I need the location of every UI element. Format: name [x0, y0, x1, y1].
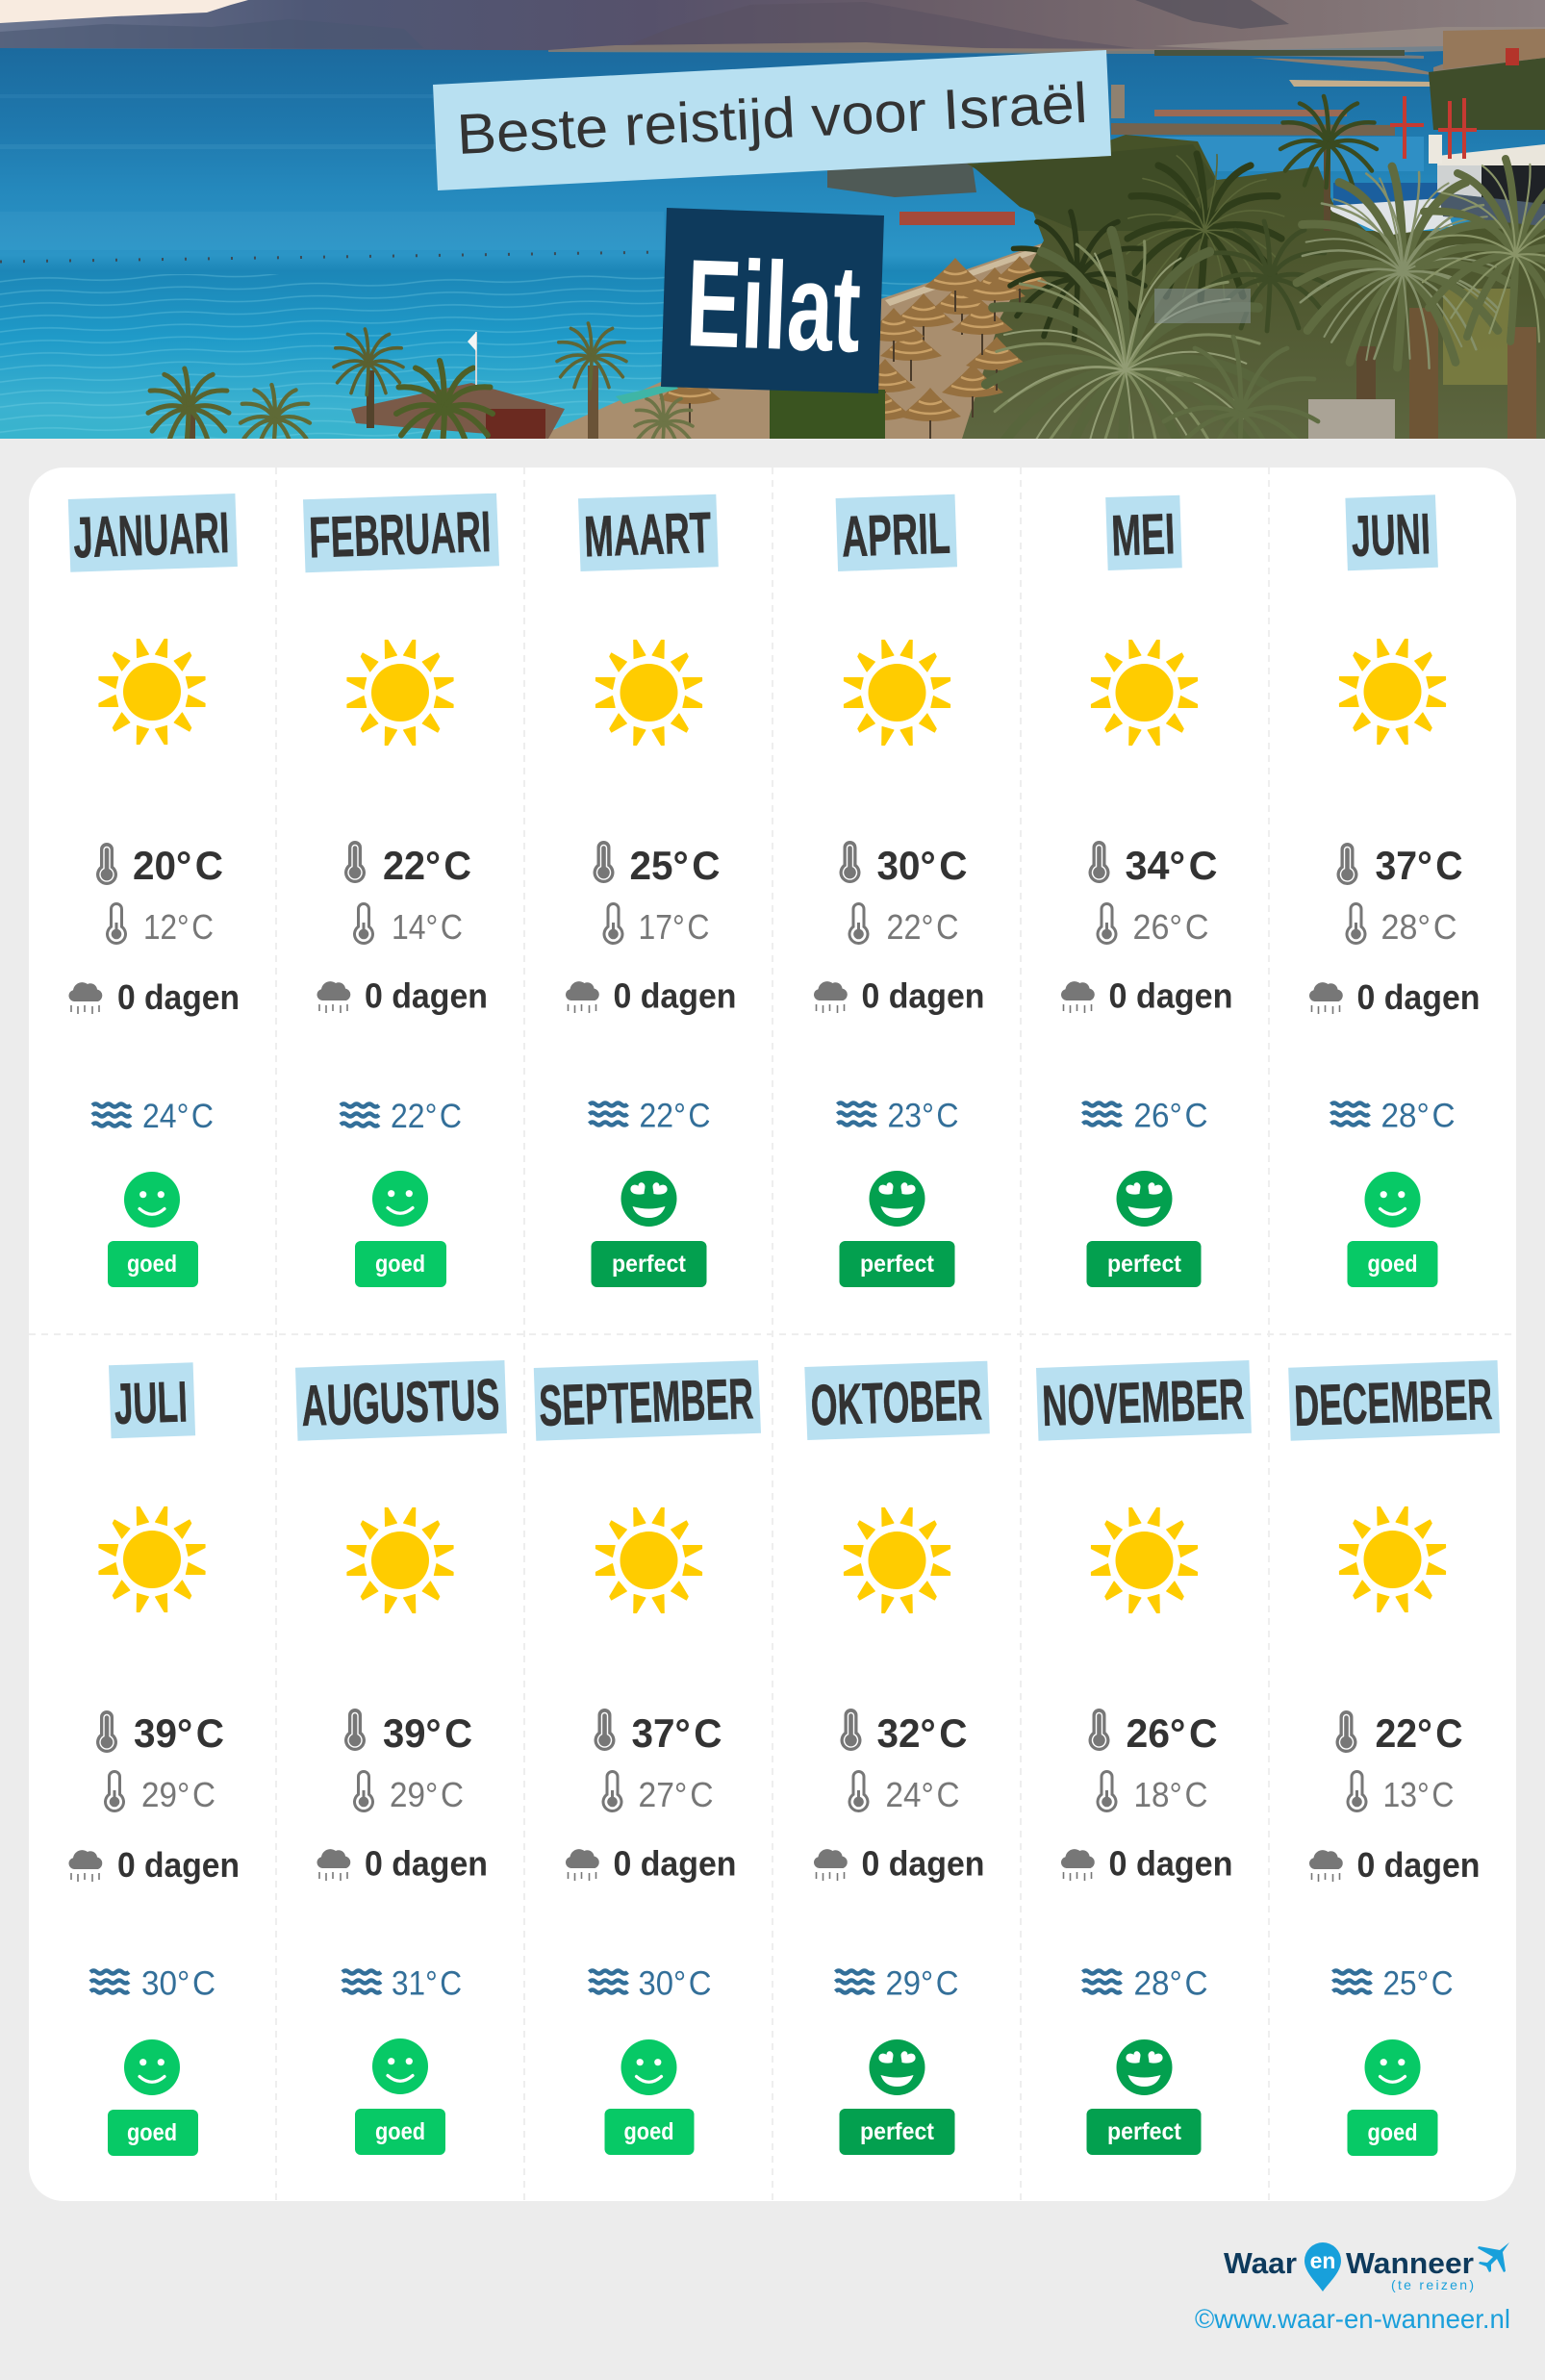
- column: juli: [68, 1362, 240, 2156]
- low temperature: 27° C: [639, 1775, 714, 1814]
- rain days: 0 dagen: [365, 1843, 488, 1884]
- rating: goed: goed: [1368, 1251, 1418, 1278]
- month label: APRIL: [841, 501, 951, 569]
- sea temperature: 29° C: [885, 1965, 958, 2003]
- high temperature: [595, 1709, 722, 1756]
- rating: perfect: [1087, 1171, 1201, 1287]
- rating: perfect: [839, 1171, 954, 1287]
- high temperature: [1335, 1710, 1462, 1756]
- small palms on the left: [148, 323, 693, 452]
- pier near title: [827, 160, 976, 197]
- logo: Waar en Wanneer: Waar: [1224, 2246, 1297, 2280]
- low temperature: 17° C: [639, 907, 710, 947]
- low temperature: [602, 1770, 714, 1814]
- high temperature: [1089, 841, 1218, 888]
- sea temperature: 22° C: [391, 1098, 462, 1135]
- low temperature: 28° C: [1381, 907, 1456, 947]
- high temperature: [344, 1709, 472, 1756]
- rain days: 0 dagen: [1108, 975, 1233, 1016]
- rain days: 0 dagen: [117, 1845, 240, 1885]
- logo: Waar en Wanneer: (te reizen): [1391, 2277, 1474, 2292]
- logo: Waar en Wanneer: en: [1310, 2248, 1335, 2273]
- low temperature: [353, 1770, 464, 1814]
- month label: JANUARI: [72, 500, 230, 570]
- low temperature: 29° C: [390, 1775, 464, 1814]
- rating: perfect: [591, 1171, 706, 1287]
- sea temperature: 30° C: [639, 1965, 712, 2003]
- icon: sun: [1091, 1508, 1197, 1612]
- month label: JUNI: [1351, 501, 1431, 569]
- rain days: [566, 1843, 737, 1884]
- month label: [1036, 1360, 1252, 1441]
- high temperature: 39° C: [134, 1710, 224, 1756]
- sea temperature: [1331, 1098, 1455, 1135]
- sea temperature: 25° C: [1383, 1965, 1453, 2003]
- icon: sun: [845, 1508, 950, 1612]
- rating: goed: [108, 1172, 198, 1287]
- subtitle banner: Eilat: [661, 208, 884, 393]
- month label: [295, 1360, 507, 1441]
- boats and jetty: [1154, 110, 1347, 116]
- sea temperature: 28° C: [1381, 1098, 1455, 1135]
- month label: [836, 494, 957, 571]
- column: december: [1288, 1360, 1500, 2156]
- rain days: [317, 975, 488, 1016]
- rain days: [814, 975, 985, 1016]
- left beach hut: [351, 383, 565, 439]
- column: september: [534, 1360, 761, 2155]
- sea temperature: 23° C: [887, 1098, 958, 1135]
- sea temperature: [341, 1098, 462, 1135]
- month label: MAART: [583, 500, 712, 569]
- low temperature: [1097, 1770, 1208, 1814]
- sea temperature: 24° C: [142, 1098, 214, 1135]
- high temperature: [839, 841, 968, 888]
- month label: SEPTEMBER: [538, 1366, 754, 1438]
- column: maart: [566, 494, 737, 1287]
- rain days: [68, 977, 240, 1017]
- rating: goed: [1347, 1172, 1437, 1287]
- month label: [303, 494, 499, 572]
- rain days: 0 dagen: [1356, 1845, 1480, 1885]
- rain days: 0 dagen: [862, 1843, 985, 1884]
- low temperature: 14° C: [392, 907, 463, 947]
- high temperature: 30° C: [877, 843, 968, 888]
- rating: goed: goed: [127, 1251, 177, 1278]
- rain days: [68, 1845, 240, 1885]
- high temperature: [593, 841, 720, 888]
- rating: goed: goed: [375, 1251, 425, 1278]
- month label: OKTOBER: [810, 1367, 983, 1437]
- panel: climate table card: [29, 468, 1516, 2201]
- month label: [109, 1362, 195, 1438]
- rating: goed: [355, 1171, 446, 1287]
- rating: perfect: perfect: [1107, 1251, 1182, 1278]
- title text: Beste reistijd voor Israël: [455, 71, 1089, 166]
- rating: goed: goed: [127, 2119, 177, 2146]
- low temperature: 13° C: [1383, 1775, 1455, 1814]
- rating: goed: goed: [375, 2118, 425, 2145]
- sea temperature: 22° C: [639, 1098, 710, 1135]
- rating: perfect: perfect: [860, 2118, 935, 2145]
- rating: perfect: [1087, 2039, 1201, 2155]
- low temperature: [848, 902, 958, 947]
- column: januari: [68, 494, 240, 1287]
- column: februari: [303, 494, 499, 1287]
- low temperature: [848, 1770, 960, 1814]
- low temperature: [1347, 1770, 1455, 1814]
- sea temperature: [1083, 1098, 1208, 1135]
- high temperature: 22° C: [383, 843, 471, 888]
- rating: goed: [355, 2038, 445, 2155]
- sea temperature: [837, 1098, 958, 1135]
- icon: sun: [99, 639, 205, 745]
- column: april: [814, 494, 985, 1287]
- high temperature: 22° C: [1376, 1710, 1462, 1756]
- sea temperature: [92, 1098, 214, 1135]
- column: mei: [1061, 495, 1233, 1287]
- source url: ©www.waar-en-wanneer.nl: [1195, 2304, 1510, 2334]
- low temperature: 12° C: [143, 907, 214, 947]
- high temperature: 37° C: [631, 1710, 722, 1756]
- rain days: [566, 975, 737, 1016]
- rain days: [1061, 1843, 1233, 1884]
- rain days: [1309, 977, 1480, 1017]
- rating: goed: goed: [623, 2118, 673, 2145]
- high temperature: [841, 1709, 968, 1756]
- month label: [68, 494, 238, 572]
- sea temperature: 31° C: [392, 1965, 462, 2003]
- month label: AUGUSTUS: [300, 1367, 500, 1438]
- column: oktober: [804, 1361, 990, 2155]
- low temperature: [1097, 902, 1208, 947]
- high temperature: 25° C: [629, 843, 720, 888]
- column: november: [1036, 1360, 1252, 2155]
- rating: perfect: perfect: [612, 1251, 687, 1278]
- rain days: 0 dagen: [614, 1843, 737, 1884]
- month label: [1105, 495, 1182, 570]
- rating: perfect: perfect: [1107, 2118, 1182, 2145]
- rain days: 0 dagen: [862, 975, 985, 1016]
- icon: sun: [596, 1508, 702, 1612]
- rain days: 0 dagen: [614, 975, 737, 1016]
- rain days: 0 dagen: [1356, 977, 1480, 1017]
- low temperature: [353, 902, 463, 947]
- title banner: [433, 50, 1111, 190]
- rain days: [1061, 975, 1233, 1016]
- high temperature: [96, 843, 223, 888]
- low temperature: 26° C: [1133, 907, 1208, 947]
- icon: sun: [347, 641, 453, 745]
- sea temperature: 26° C: [1133, 1098, 1208, 1135]
- high temperature: 39° C: [383, 1710, 472, 1756]
- month label: FEBRUARI: [308, 499, 492, 570]
- icon: sun: [1091, 641, 1197, 745]
- beach sand: [545, 242, 1043, 439]
- right building: [1333, 183, 1443, 206]
- low temperature: 29° C: [141, 1775, 215, 1814]
- logo: Waar en Wanneer: Wanneer: [1346, 2246, 1474, 2280]
- rain days: [1309, 1845, 1480, 1885]
- rating: goed: [1347, 2039, 1437, 2156]
- month label: [1345, 494, 1438, 570]
- column: augustus: [295, 1360, 507, 2155]
- land far right: [1289, 80, 1433, 87]
- high temperature: 37° C: [1376, 843, 1462, 888]
- icon: sun: [347, 1508, 453, 1612]
- low temperature: 18° C: [1133, 1775, 1208, 1814]
- rating: goed: goed: [1368, 2119, 1418, 2146]
- rain days: 0 dagen: [1108, 1843, 1233, 1884]
- palms: [770, 96, 1545, 516]
- hero photo: Eilat coastline: [0, 0, 1545, 439]
- month label: [578, 494, 719, 571]
- logo: Waar en Wanneer: [1224, 2242, 1509, 2292]
- subtitle text: Eilat: [684, 234, 863, 379]
- rain days: [814, 1843, 985, 1884]
- low temperature: [1345, 902, 1456, 947]
- month label: JULI: [114, 1369, 189, 1436]
- month label: NOVEMBER: [1041, 1367, 1245, 1438]
- high temperature: [1089, 1709, 1218, 1756]
- low temperature: [106, 902, 214, 947]
- high temperature: 32° C: [877, 1710, 968, 1756]
- rating: goed: [604, 2039, 695, 2155]
- high temperature: [96, 1710, 224, 1756]
- rating: goed: [108, 2039, 198, 2156]
- icon: sun: [1339, 1506, 1445, 1612]
- sea temperature: [90, 1965, 215, 2003]
- rain days: [317, 1843, 488, 1884]
- tree masses: [962, 135, 1545, 439]
- month label: MEI: [1110, 501, 1176, 568]
- sea temperature: [835, 1965, 958, 2003]
- icon: sun: [99, 1506, 205, 1612]
- high temperature: 20° C: [133, 843, 223, 888]
- column: juni: [1309, 494, 1480, 1287]
- low temperature: [104, 1770, 215, 1814]
- low temperature: 24° C: [885, 1775, 960, 1814]
- icon: sun: [596, 641, 702, 745]
- icon: sun: [845, 641, 950, 745]
- rating: perfect: [839, 2039, 954, 2155]
- month label: [534, 1360, 761, 1441]
- high temperature: [344, 841, 471, 888]
- sea temperature: [1083, 1965, 1208, 2003]
- sea temperature: [342, 1965, 462, 2003]
- high temperature: 34° C: [1126, 843, 1218, 888]
- rating: perfect: perfect: [860, 1251, 935, 1278]
- month label: [804, 1361, 990, 1440]
- high temperature: [1337, 843, 1462, 888]
- icon: sun: [1339, 639, 1445, 745]
- sea temperature: [1333, 1965, 1453, 2003]
- sea temperature: [589, 1098, 710, 1135]
- beach umbrellas: [659, 256, 1051, 442]
- sea temperature: 30° C: [141, 1965, 215, 2003]
- low temperature: [602, 902, 710, 947]
- low temperature: 22° C: [887, 907, 958, 947]
- rain days: 0 dagen: [365, 975, 488, 1016]
- sea temperature: [589, 1965, 712, 2003]
- high temperature: 26° C: [1126, 1710, 1218, 1756]
- sea temperature: 28° C: [1133, 1965, 1208, 2003]
- rain days: 0 dagen: [117, 977, 240, 1017]
